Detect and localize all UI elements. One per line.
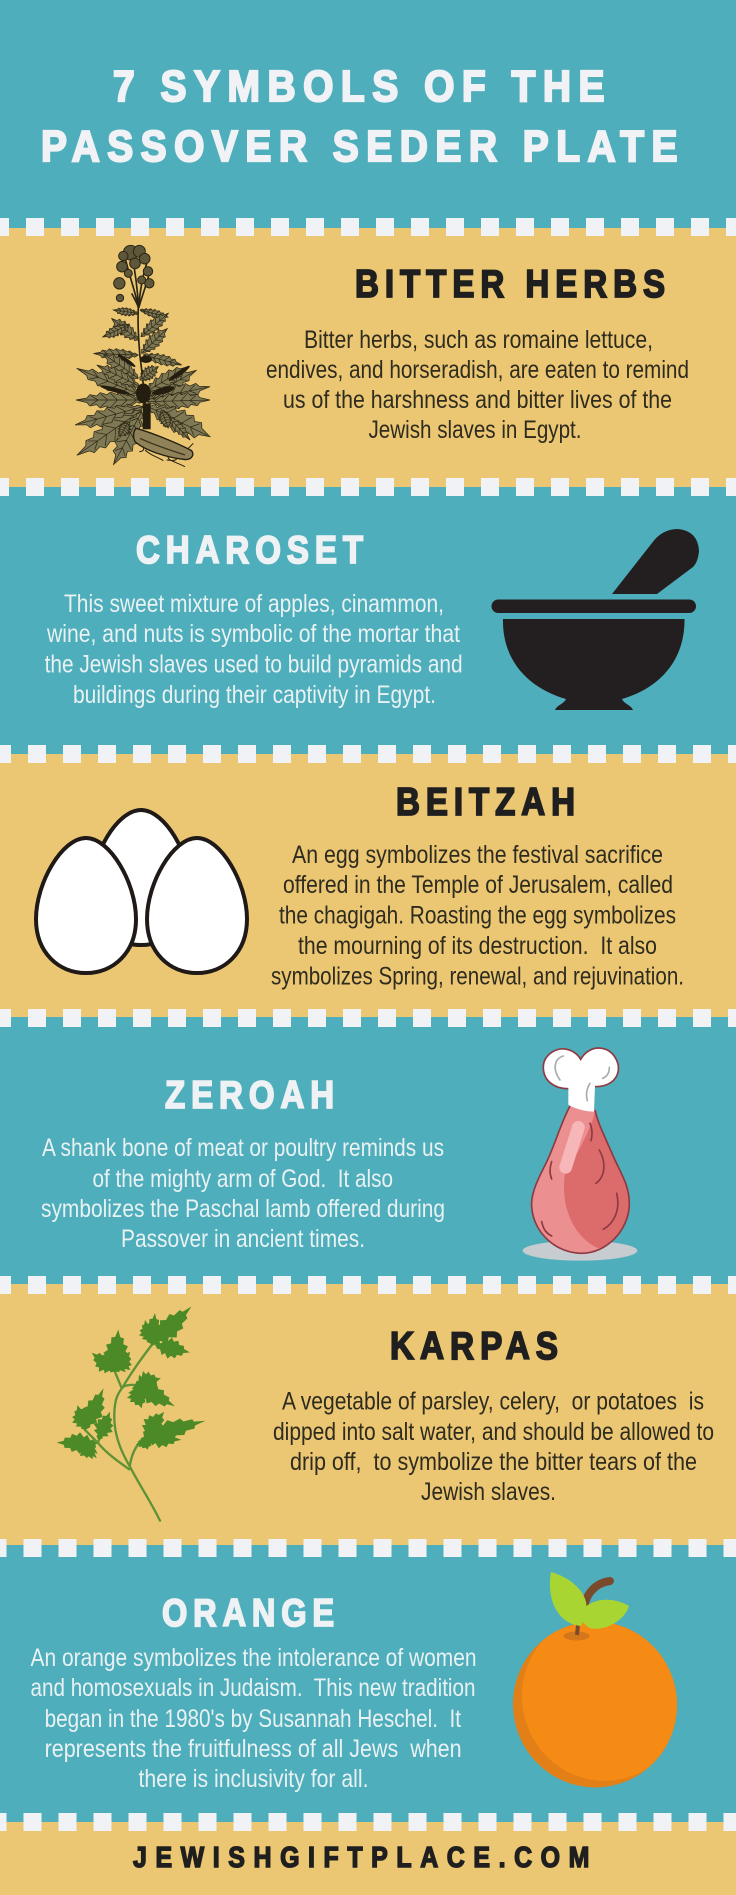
footer: website: JEWISHGIFTPLACE.COM [133, 1842, 598, 1874]
text: charoset description: buildings during their captivity in Egypt. [73, 681, 436, 709]
text: orange description: there is inclusivity for all. [138, 1765, 368, 1793]
text: bitter herbs description: Bitter herbs, such as romaine lettuce, [304, 326, 653, 354]
text: charoset description: wine, and nuts is symbolic of the mortar that [46, 620, 460, 648]
heading: charoset: CHAROSET [136, 529, 369, 572]
text: orange description: began in the 1980's by Susannah Heschel. It [45, 1705, 461, 1733]
icon: parsley sprig [56, 1298, 208, 1521]
panel: charoset [45, 529, 699, 710]
text: zeroah description: symbolizes the Paschal lamb offered during [41, 1195, 445, 1223]
panel: zeroah [41, 1048, 637, 1261]
panel: orange [30, 1572, 702, 1803]
heading: karpas: KARPAS [390, 1325, 564, 1368]
text: beitzah description: offered in the Temple of Jerusalem, called [283, 871, 673, 899]
icon: orange fruit [512, 1572, 678, 1788]
icon: three eggs [36, 810, 247, 973]
text: zeroah description: A shank bone of meat or poultry reminds us [42, 1134, 444, 1162]
icon: shank bone [523, 1048, 637, 1261]
text: orange description: represents the fruitfulness of all Jews when [45, 1735, 462, 1763]
text: beitzah description: the mourning of its destruction. It also [298, 932, 657, 960]
heading: orange: ORANGE [162, 1592, 340, 1635]
text: zeroah description: Passover in ancient times. [121, 1225, 365, 1253]
text: charoset description: This sweet mixture of apples, cinammon, [64, 590, 444, 618]
text: charoset description: the Jewish slaves used to build pyramids and [45, 650, 463, 678]
panel: bitter herbs [71, 245, 689, 470]
title: 7 SYMBOLS OF THE [113, 62, 612, 111]
text: charoset description [45, 590, 463, 709]
heading: zeroah: ZEROAH [165, 1074, 340, 1117]
text: orange description [30, 1644, 476, 1793]
text: orange description: An orange symbolizes the intolerance of women [30, 1644, 476, 1672]
text: bitter herbs description: us of the harshness and bitter lives of the [283, 386, 672, 414]
text: bitter herbs description [266, 326, 689, 444]
text: zeroah description: of the mighty arm of God. It also [92, 1165, 393, 1193]
text: bitter herbs description: Jewish slaves in Egypt. [368, 416, 582, 444]
icon: bitter herb plant [71, 245, 216, 470]
icon: mortar and pestle [492, 529, 699, 710]
heading: bitter herbs: BITTER HERBS [355, 263, 671, 306]
text: karpas description: Jewish slaves. [421, 1478, 556, 1506]
heading: beitzah: BEITZAH [396, 781, 581, 824]
text: beitzah description: An egg symbolizes the festival sacrifice [292, 841, 663, 869]
text: zeroah description [41, 1134, 445, 1253]
panel: karpas [56, 1298, 714, 1521]
text: karpas description [273, 1388, 714, 1506]
panel: beitzah [36, 781, 684, 990]
title [41, 62, 685, 171]
text: beitzah description [271, 841, 684, 990]
text: orange description: and homosexuals in Judaism. This new tradition [30, 1674, 476, 1702]
